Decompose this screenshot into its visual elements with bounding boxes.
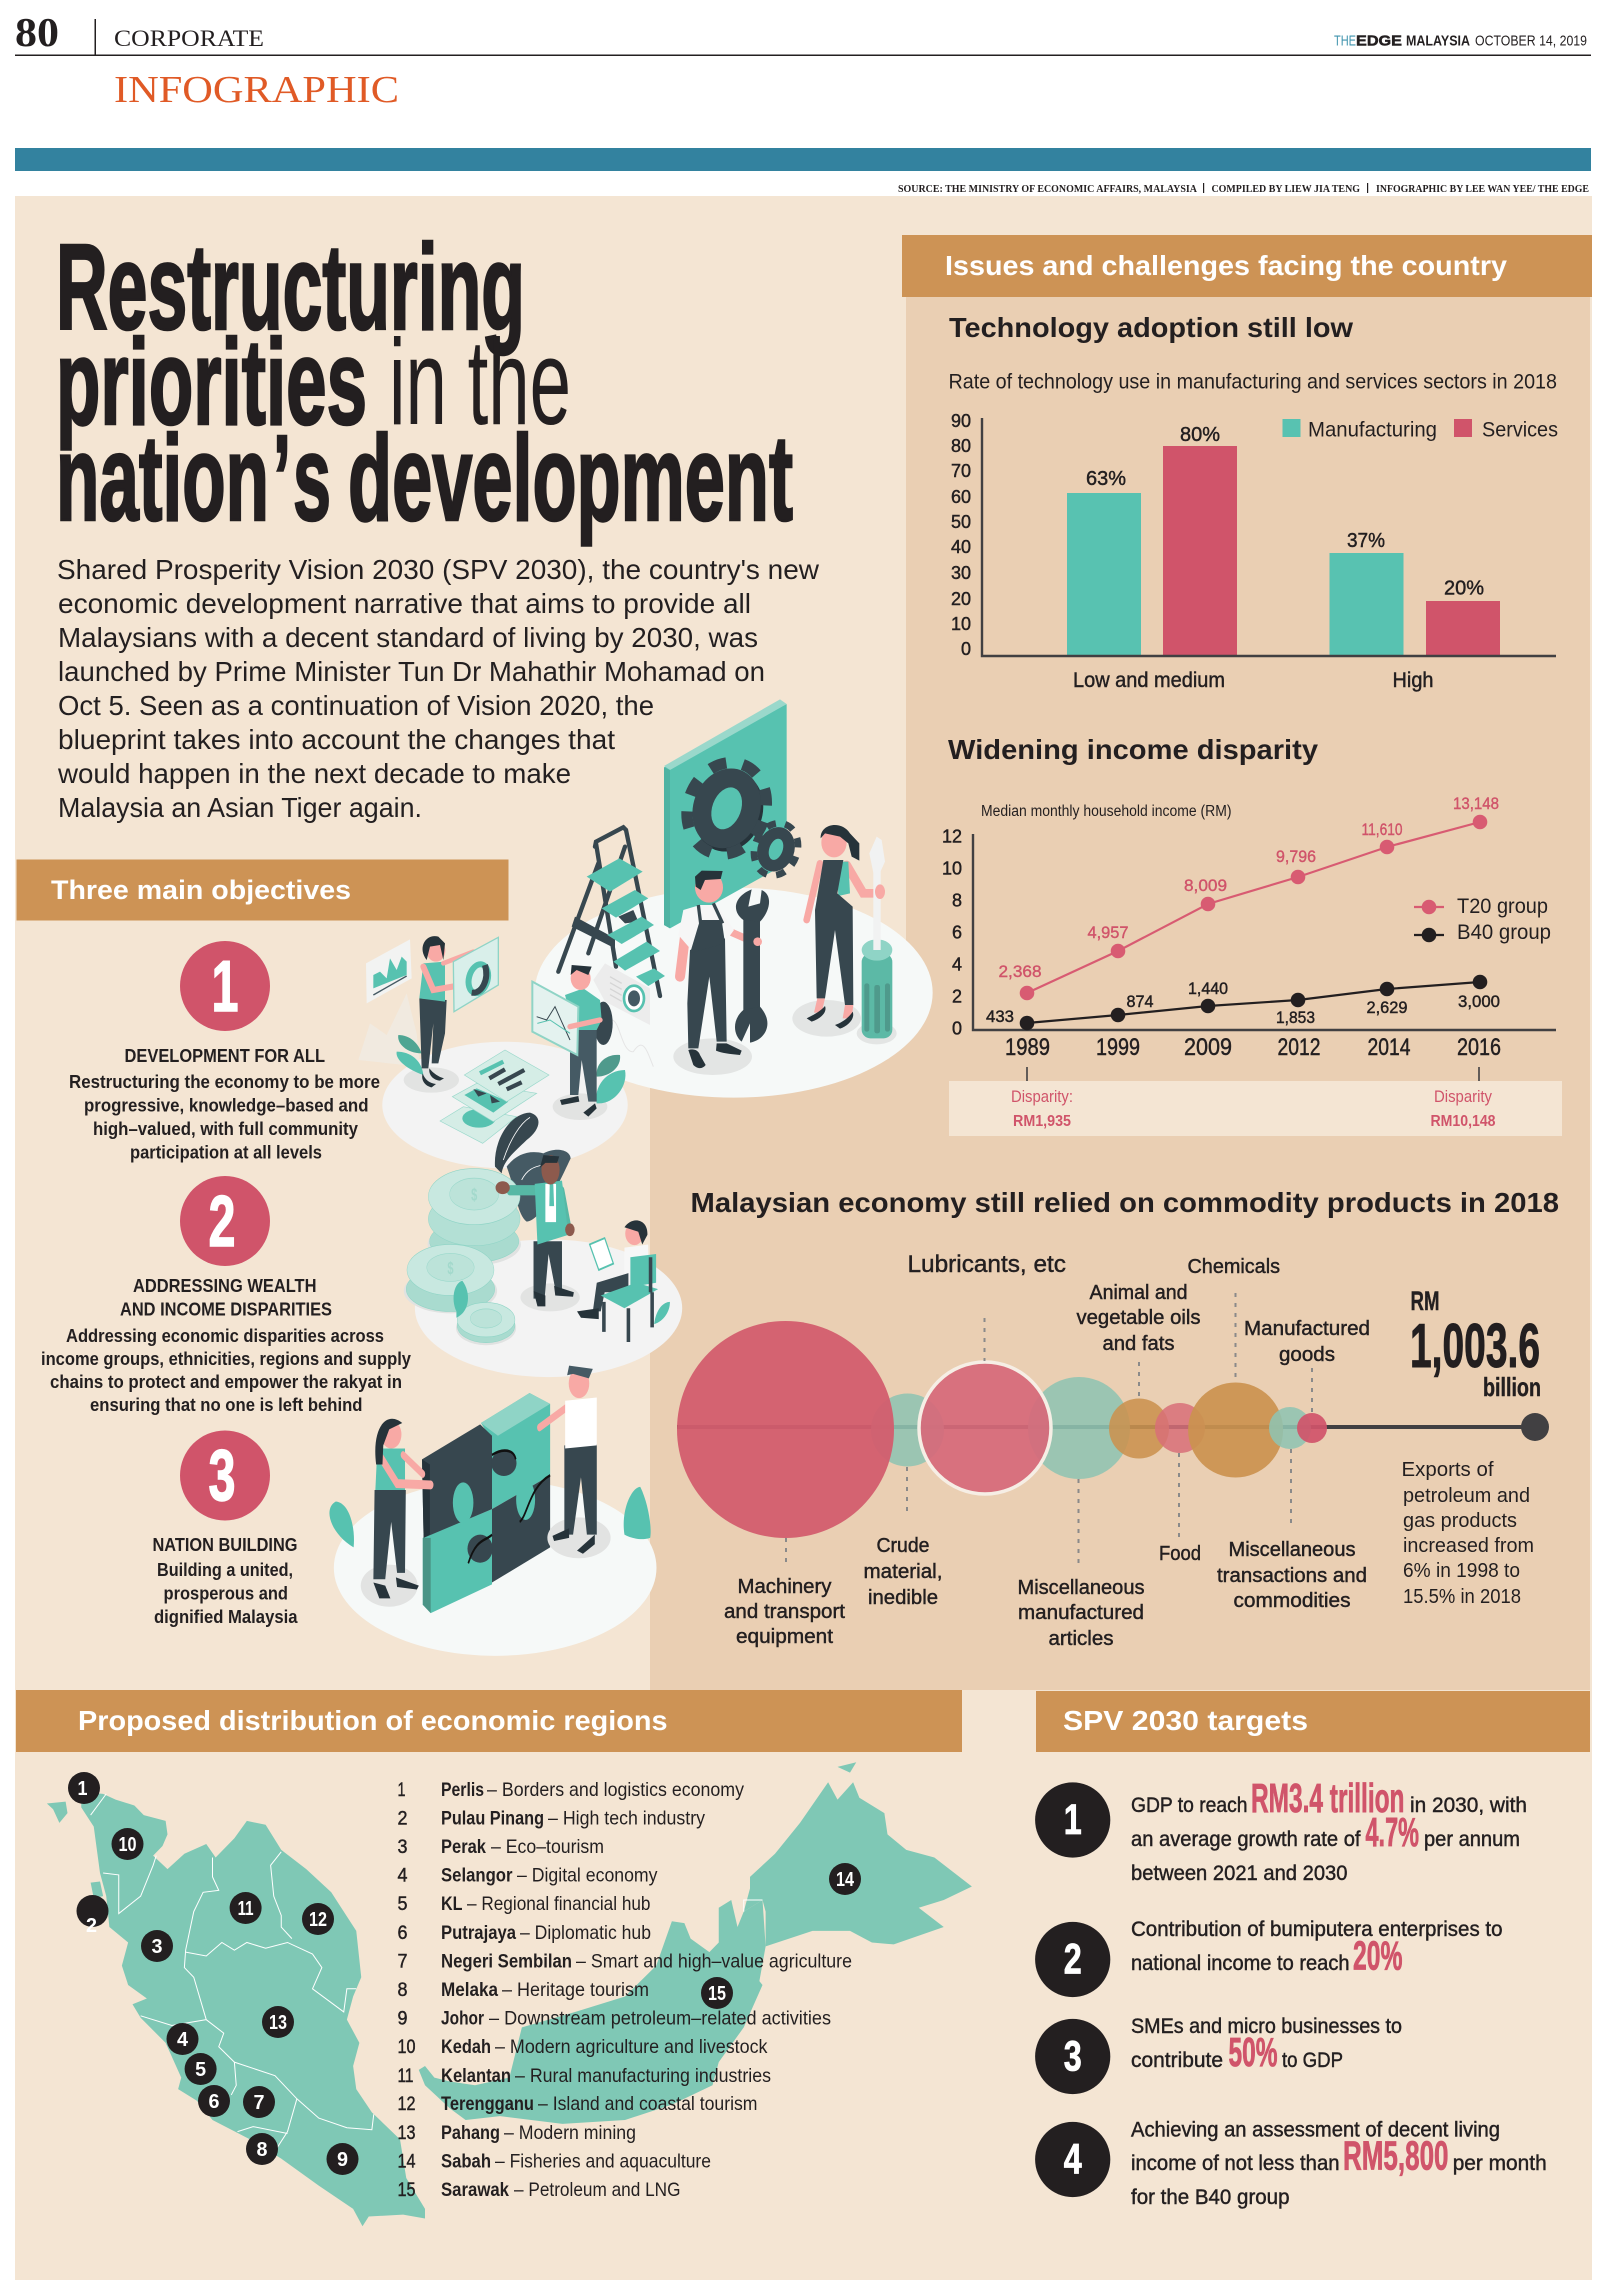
- bar chart: 70: [951, 461, 971, 481]
- bar chart: 10: [951, 614, 971, 634]
- map badges: 12: [309, 1909, 327, 1931]
- disparity box: Disparity:: [1011, 1087, 1073, 1106]
- region list: – High tech industry: [548, 1808, 705, 1830]
- bar chart: 90: [951, 411, 971, 431]
- map badges: 1: [78, 1778, 88, 1800]
- objective 2: [41, 1176, 411, 1415]
- section label: infographic: INFOGRAPHIC: [114, 69, 399, 111]
- subtitle: Rate of technology use in manufacturing and services sectors in 2018: [948, 370, 1557, 394]
- map badges: 6: [208, 2091, 220, 2113]
- objective 2: 2: [208, 1182, 236, 1262]
- region list: 5: [398, 1893, 408, 1915]
- map badges: 7: [254, 2092, 264, 2114]
- region list: 6: [398, 1922, 408, 1944]
- region list: – Downstream petroleum–related activities: [489, 2008, 831, 2030]
- title: development: [348, 410, 793, 546]
- legend: Manufacturing: [1308, 418, 1437, 442]
- region list: 3: [398, 1836, 408, 1858]
- target 4: income of not less than: [1131, 2152, 1340, 2175]
- heading: Widening income disparity: [948, 734, 1318, 765]
- target 2: Contribution of bumiputera enterprises to: [1131, 1918, 1502, 1941]
- map badges: 4: [177, 2029, 189, 2051]
- line chart: 4: [952, 954, 962, 974]
- map badges: 15: [708, 1983, 726, 2005]
- ladder: [558, 827, 665, 996]
- legend: T20 group: [1457, 895, 1548, 918]
- line chart: 2,368: [998, 962, 1042, 981]
- label: crude material: material,: [864, 1561, 942, 1583]
- region list: 13: [398, 2122, 416, 2144]
- panel: widening income disparity: [942, 734, 1562, 1136]
- region list: 15: [398, 2179, 416, 2201]
- target 1: per annum: [1424, 1828, 1520, 1851]
- target 3: SMEs and micro businesses to: [1131, 2015, 1402, 2038]
- panel: SPV 2030 targets: [1035, 1691, 1590, 2209]
- header: [16, 1690, 962, 1752]
- region list: – Heritage tourism: [502, 1979, 649, 2001]
- line chart: 6: [952, 922, 962, 942]
- map badges: 13: [269, 2012, 287, 2034]
- region list: 2: [398, 1808, 408, 1830]
- exports note: [1402, 1459, 1534, 1608]
- exports note: gas products: [1403, 1510, 1517, 1532]
- target 3: 3: [1064, 2032, 1082, 2080]
- title: nation: [56, 410, 269, 546]
- seated man with chair: [577, 1220, 670, 1342]
- region list: 11: [398, 2065, 414, 2087]
- label: miscellaneous transactions: Miscellaneous: [1228, 1539, 1356, 1561]
- header: [1036, 1691, 1590, 1752]
- publication and date: THE: [1334, 32, 1356, 50]
- title: s: [293, 410, 331, 546]
- label: miscellaneous articles: manufactured: [1018, 1602, 1144, 1624]
- label: animal oils: Animal and: [1090, 1282, 1188, 1304]
- bar chart: 20: [951, 589, 971, 609]
- region list: – Fisheries and aquaculture: [495, 2150, 711, 2172]
- screwdriver: [857, 837, 897, 1044]
- label: animal oils: vegetable oils: [1076, 1307, 1200, 1329]
- leader lines: [786, 1293, 1312, 1563]
- region list: KL: [441, 1893, 463, 1915]
- objective 3: prosperous and: [164, 1584, 288, 1604]
- objective 2: ADDRESSING WEALTH: [133, 1276, 316, 1296]
- intro paragraph: economic development narrative that aims to provide all: [58, 588, 751, 619]
- panel: commodity products: [677, 1187, 1559, 1650]
- target 3: 50%: [1228, 2029, 1278, 2075]
- label: miscellaneous articles: Miscellaneous: [1018, 1577, 1144, 1599]
- map badges: 11: [238, 1898, 254, 1920]
- section name: CORPORATE: [114, 26, 264, 51]
- label: machinery: Machinery: [738, 1576, 832, 1598]
- region list: – Regional financial hub: [467, 1893, 651, 1915]
- line chart: 9,796: [1276, 847, 1316, 866]
- header: Proposed distribution of economic regions: [78, 1705, 668, 1736]
- intro paragraph: [57, 554, 820, 823]
- panel: economic regions: [16, 1690, 972, 2226]
- map of Malaysia: [47, 1762, 972, 2226]
- objective 3: 3: [208, 1436, 236, 1516]
- objective 1: DEVELOPMENT FOR ALL: [124, 1046, 325, 1066]
- target 4: RM5,800: [1343, 2132, 1448, 2178]
- woman with screwdriver: [792, 825, 878, 1037]
- man in teal jacket: [496, 1155, 580, 1311]
- bar chart: 63%: [1086, 468, 1126, 490]
- coin stacks: $: [471, 1186, 478, 1205]
- intro paragraph: Shared Prosperity Vision 2030 (SPV 2030), the country's new: [57, 554, 820, 585]
- region list: – Modern agriculture and livestock: [495, 2036, 768, 2058]
- woman at puzzle: [361, 1419, 431, 1607]
- source credits: COMPILED BY LIEW JIA TENG: [1212, 183, 1360, 195]
- region list: Kelantan: [441, 2065, 511, 2087]
- faint waves: [358, 993, 420, 1067]
- intro paragraph: Malaysia an Asian Tiger again.: [58, 792, 422, 823]
- bar chart: 20%: [1444, 578, 1484, 600]
- header: Three main objectives: [51, 875, 351, 905]
- legend: B40 group: [1457, 921, 1551, 944]
- masthead: [15, 9, 1591, 56]
- line chart: 13,148: [1453, 794, 1499, 813]
- objective 3: Building a united,: [157, 1560, 293, 1580]
- bar chart: High: [1392, 669, 1434, 692]
- title: ’: [273, 410, 291, 546]
- map badges: 5: [195, 2059, 206, 2081]
- plate: puzzle scene: [334, 1480, 656, 1656]
- line chart: 10: [942, 858, 962, 878]
- line chart: [942, 794, 1556, 1061]
- label: manufactured goods: [1244, 1318, 1370, 1366]
- bar chart: 50: [951, 512, 971, 532]
- exports note: petroleum and: [1403, 1485, 1530, 1507]
- region list: Pulau Pinang: [441, 1808, 544, 1830]
- label: miscellaneous transactions: transactions and: [1217, 1565, 1367, 1587]
- region list: Selangor: [441, 1864, 513, 1886]
- line chart: 2012: [1278, 1034, 1320, 1061]
- legend: Services: [1482, 418, 1558, 442]
- target 2: 20%: [1353, 1932, 1402, 1978]
- exports note: Exports of: [1402, 1459, 1494, 1481]
- panel: three main objectives: [16, 860, 508, 1627]
- map badges: 14: [836, 1869, 855, 1891]
- region list: Sarawak: [441, 2179, 509, 2201]
- line chart: 1989: [1005, 1034, 1050, 1061]
- label: manufactured goods: Manufactured: [1244, 1318, 1370, 1340]
- region list: [398, 1779, 852, 2201]
- line chart: 12: [942, 826, 962, 846]
- region list: Perak: [441, 1836, 486, 1858]
- man at puzzle: [539, 1366, 611, 1558]
- woman presenting: [397, 936, 473, 1093]
- plate: [535, 888, 933, 1098]
- target 4: Achieving an assessment of decent living: [1131, 2118, 1500, 2142]
- region list: 4: [398, 1864, 408, 1886]
- line chart: 4,957: [1088, 923, 1128, 942]
- target 3: [1035, 2015, 1402, 2094]
- target 4: [1035, 2118, 1547, 2209]
- bubble timeline: [677, 1321, 1549, 1538]
- target 2: 2: [1064, 1936, 1082, 1984]
- region list: Kedah: [441, 2036, 491, 2058]
- region list: – Diplomatic hub: [520, 1922, 651, 1944]
- objective 1: Restructuring the economy to be more: [69, 1072, 380, 1092]
- target 3: contribute: [1131, 2049, 1223, 2072]
- bar chart: 40: [951, 537, 971, 557]
- objective 2: AND INCOME DISPARITIES: [120, 1300, 332, 1320]
- illustration: coins and meeting scene: [329, 1155, 682, 1656]
- title: Restructuring: [56, 219, 525, 355]
- region list: Negeri Sembilan: [441, 1950, 572, 1972]
- line chart: 874: [1126, 992, 1154, 1011]
- label: machinery: and transport: [724, 1601, 845, 1623]
- coin stacks: $: [447, 1259, 454, 1279]
- target 1: RM3.4 trillion: [1251, 1775, 1404, 1821]
- label: manufactured goods: goods: [1279, 1344, 1335, 1366]
- objective 3: NATION BUILDING: [152, 1535, 298, 1555]
- map badges: [68, 1772, 861, 2175]
- line chart: 8,009: [1184, 876, 1227, 895]
- region list: 12: [398, 2093, 416, 2115]
- wrench: [735, 889, 769, 1043]
- region list: Sabah: [441, 2150, 491, 2172]
- objective 2: Addressing economic disparities across: [66, 1326, 384, 1346]
- bar chart: 80%: [1180, 424, 1220, 446]
- source credits: [898, 183, 1589, 195]
- stacked papers: [440, 1050, 549, 1143]
- region list: Perlis: [441, 1779, 484, 1801]
- disparity box: RM1,935: [1013, 1113, 1071, 1130]
- region list: Johor: [441, 2008, 484, 2030]
- donut card: [453, 937, 498, 1012]
- intro paragraph: would happen in the next decade to make: [57, 758, 571, 789]
- total value: RM: [1410, 1286, 1440, 1316]
- coin stacks: [404, 1169, 521, 1345]
- line chart: 1,853: [1276, 1008, 1315, 1027]
- panel: issues background: [650, 297, 1590, 1690]
- label: food: Food: [1159, 1543, 1201, 1565]
- region list: 8: [398, 1979, 408, 2001]
- page number: 80: [15, 9, 59, 55]
- map badges: 9: [337, 2149, 348, 2171]
- heading: Malaysian economy still relied on commodity products in 2018: [690, 1187, 1559, 1218]
- target 1: 4.7%: [1366, 1809, 1419, 1855]
- line chart: 2,629: [1366, 998, 1408, 1017]
- disparity box: [949, 1081, 1562, 1136]
- region list: – Eco–tourism: [491, 1836, 604, 1858]
- region list: 7: [398, 1950, 408, 1972]
- label: chemicals: Chemicals: [1188, 1256, 1280, 1278]
- objective 2: chains to protect and empower the rakyat in: [50, 1372, 402, 1392]
- line chart: 3,000: [1458, 992, 1500, 1011]
- label: crude material: [864, 1535, 942, 1609]
- source credits: SOURCE: THE MINISTRY OF ECONOMIC AFFAIRS, MALAYSIA: [898, 183, 1197, 195]
- line chart: 0: [952, 1018, 962, 1038]
- disparity box: RM10,148: [1430, 1113, 1496, 1130]
- heading: Technology adoption still low: [949, 312, 1353, 343]
- label: crude material: inedible: [868, 1587, 938, 1609]
- objective 3: [152, 1430, 298, 1627]
- region list: – Modern mining: [504, 2122, 636, 2144]
- plate: [415, 1239, 682, 1377]
- objective 1: participation at all levels: [130, 1142, 322, 1162]
- total value: [1410, 1286, 1541, 1402]
- exports note: 6% in 1998 to: [1403, 1560, 1520, 1582]
- intro paragraph: launched by Prime Minister Tun Dr Mahathir Mohamad on: [58, 656, 765, 687]
- region list: – Smart and high–value agriculture: [576, 1950, 852, 1972]
- objective 1: [69, 941, 380, 1162]
- line chart: 8: [952, 890, 962, 910]
- line chart: 1,440: [1188, 979, 1228, 998]
- target 2: [1035, 1918, 1502, 1997]
- label: crude material: Crude: [876, 1535, 930, 1557]
- man with wrench: [673, 871, 757, 1075]
- target 3: to GDP: [1282, 2049, 1343, 2072]
- region list: 10: [398, 2036, 416, 2058]
- label: machinery: [724, 1576, 845, 1648]
- region list: – Digital economy: [517, 1864, 658, 1886]
- gear board: [664, 699, 805, 928]
- label: animal oils: and fats: [1102, 1333, 1174, 1355]
- target 4: for the B40 group: [1131, 2186, 1290, 2209]
- label: lubricants: Lubricants, etc: [908, 1251, 1066, 1278]
- bar chart: 60: [951, 487, 971, 507]
- map badges: 8: [256, 2139, 268, 2161]
- region list: 9: [398, 2008, 408, 2030]
- line chart: 11,610: [1362, 820, 1402, 839]
- sensor card: [593, 963, 653, 1067]
- bar chart: 37%: [1347, 530, 1385, 552]
- bar chart: 30: [951, 563, 971, 583]
- label: miscellaneous transactions: [1217, 1539, 1367, 1612]
- line chart: 2014: [1368, 1034, 1410, 1061]
- line chart: 2: [952, 986, 962, 1006]
- target 1: GDP to reach: [1131, 1794, 1248, 1817]
- bar chart: Low and medium: [1073, 669, 1225, 692]
- objective 2: income groups, ethnicities, regions and supply: [41, 1349, 411, 1369]
- target 1: [1035, 1775, 1527, 1885]
- map badges: 10: [118, 1834, 136, 1856]
- puzzle: [422, 1393, 550, 1613]
- intro paragraph: Oct 5. Seen as a continuation of Vision 2020, the: [58, 690, 654, 721]
- region list: – Rural manufacturing industries: [515, 2065, 771, 2087]
- target 1: 1: [1064, 1796, 1082, 1844]
- region list: Terengganu: [441, 2093, 534, 2115]
- bar chart: [951, 411, 1556, 692]
- label: miscellaneous articles: articles: [1048, 1628, 1114, 1650]
- teal banner: [15, 148, 1591, 171]
- chart card: [366, 939, 412, 1003]
- bar chart: 80: [951, 436, 971, 456]
- illustration: analysts scene: [358, 936, 625, 1222]
- line chart: 433: [986, 1007, 1014, 1026]
- header: issues and challenges: Issues and challenges facing the country: [945, 250, 1507, 281]
- plate: data scene: [382, 1042, 628, 1168]
- illustration: gears and tools team: [535, 699, 933, 1098]
- label: miscellaneous articles: [1018, 1577, 1144, 1650]
- region list: Melaka: [441, 1979, 498, 2001]
- target 1: in 2030, with: [1410, 1794, 1527, 1817]
- leaves: [329, 1487, 651, 1547]
- region list: 1: [398, 1779, 406, 1801]
- target 2: national income to reach: [1131, 1952, 1350, 1975]
- map badges: 2: [86, 1915, 97, 1937]
- objective 1: 1: [212, 947, 238, 1027]
- publication and date: [1334, 32, 1587, 50]
- label: machinery: equipment: [736, 1626, 833, 1648]
- target 4: per month: [1453, 2152, 1547, 2175]
- title: in the: [389, 314, 571, 450]
- region list: – Petroleum and LNG: [514, 2179, 680, 2201]
- total value: billion: [1483, 1372, 1541, 1402]
- line chart: 2009: [1184, 1034, 1232, 1061]
- objective 3: dignified Malaysia: [154, 1607, 298, 1627]
- region list: – Borders and logistics economy: [487, 1779, 744, 1801]
- publication and date: MALAYSIA: [1406, 32, 1470, 50]
- region list: – Island and coastal tourism: [538, 2093, 758, 2115]
- target 1: between 2021 and 2030: [1131, 1862, 1348, 1885]
- region list: Putrajaya: [441, 1922, 516, 1944]
- legend: [1282, 418, 1558, 442]
- target 4: 4: [1064, 2136, 1082, 2184]
- region list: 14: [398, 2150, 416, 2172]
- bar chart: 0: [961, 639, 971, 659]
- intro paragraph: Malaysians with a decent standard of living by 2030, was: [58, 622, 758, 653]
- header: SPV 2030 targets: [1063, 1705, 1308, 1736]
- intro paragraph: blueprint takes into account the changes that: [58, 724, 615, 755]
- label: animal oils: [1076, 1282, 1200, 1355]
- exports note: 15.5% in 2018: [1403, 1586, 1521, 1608]
- legend: [1414, 895, 1551, 944]
- objective 1: progressive, knowledge–based and: [84, 1096, 368, 1116]
- line chart: 1999: [1096, 1034, 1140, 1061]
- label: miscellaneous transactions: commodities: [1234, 1590, 1350, 1612]
- publication and date: EDGE: [1356, 32, 1402, 50]
- objective 2: ensuring that no one is left behind: [90, 1395, 362, 1415]
- header: issues and challenges: [902, 235, 1592, 297]
- title: priorities: [56, 314, 367, 450]
- dark leaves: [495, 1113, 571, 1222]
- line chart: 2016: [1457, 1034, 1501, 1061]
- objective 1: high–valued, with full community: [93, 1119, 358, 1139]
- region list: Pahang: [441, 2122, 500, 2144]
- disparity box: Disparity: [1434, 1087, 1492, 1106]
- panel: technology adoption: [948, 312, 1558, 692]
- map badges: 3: [152, 1936, 162, 1958]
- title: [56, 219, 793, 546]
- axis title: Median monthly household income (RM): [981, 803, 1232, 820]
- man with graph card: [532, 965, 625, 1120]
- target 1: an average growth rate of: [1131, 1828, 1361, 1851]
- header: [16, 860, 508, 920]
- exports note: increased from: [1403, 1535, 1534, 1557]
